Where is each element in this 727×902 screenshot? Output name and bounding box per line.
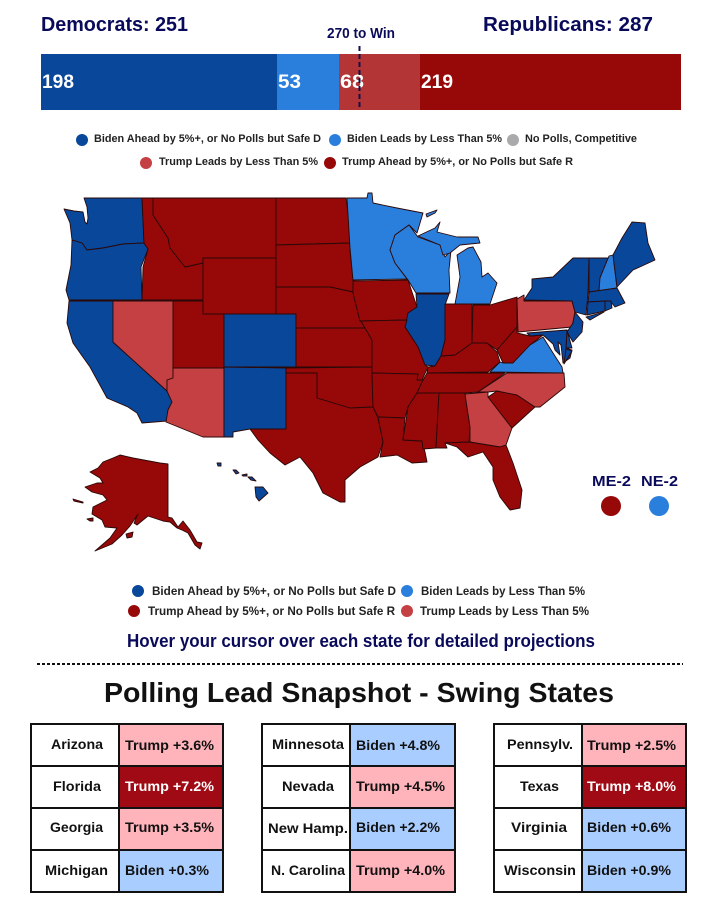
electoral vote bar: [41, 46, 681, 110]
table 2: Trump +4.0%: [356, 863, 445, 878]
legend: bottom: [128, 584, 589, 618]
label: NE-2: NE-2: [641, 473, 678, 490]
table 2: Nevada: [282, 779, 335, 794]
legend: top: No Polls, Competitive: [525, 133, 637, 145]
electoral vote bar: 219: [421, 72, 453, 93]
table 1: Georgia: [50, 820, 104, 835]
table 2: Biden +4.8%: [356, 738, 440, 753]
heading: Democrats total: Democrats: 251: [41, 14, 188, 36]
table 2: Minnesota: [272, 737, 345, 752]
electoral vote bar: 68: [340, 72, 364, 93]
table 1: Trump +7.2%: [125, 779, 214, 794]
table 3: Wisconsin: [504, 863, 576, 878]
table 3: Biden +0.9%: [587, 863, 671, 878]
table 3: Virginia: [511, 820, 568, 835]
legend: top: [76, 133, 637, 169]
table 1: Biden +0.3%: [125, 863, 209, 878]
table 2: [262, 724, 455, 892]
heading: Republicans total: Republicans: 287: [483, 14, 653, 36]
table 3: Pennsylv.: [507, 737, 573, 752]
marker: ME-2: [601, 496, 621, 516]
table 3: Biden +0.6%: [587, 820, 671, 835]
marker: NE-2: [649, 496, 669, 516]
legend: top: Biden Ahead by 5%+, or No Polls but Safe D: [94, 133, 321, 145]
label: ME-2: ME-2: [592, 473, 631, 490]
legend: bottom: Trump Leads by Less Than 5%: [420, 604, 589, 618]
table 3: [494, 724, 686, 892]
US electoral map: [64, 193, 655, 551]
table 1: Trump +3.5%: [125, 820, 214, 835]
table 3: Trump +8.0%: [587, 779, 676, 794]
legend: top: Trump Ahead by 5%+, or No Polls but Safe R: [342, 156, 573, 168]
table 2: Trump +4.5%: [356, 779, 445, 794]
legend: bottom: Trump Ahead by 5%+, or No Polls but Safe R: [148, 604, 395, 618]
table 1: Arizona: [51, 737, 104, 752]
table 2: Biden +2.2%: [356, 820, 440, 835]
table 1: Florida: [53, 779, 102, 794]
table 2: New Hamp.: [268, 821, 348, 836]
table 2: N. Carolina: [271, 863, 346, 878]
table 1: Michigan: [45, 863, 108, 878]
electoral vote bar: 53: [278, 72, 301, 93]
electoral vote bar: 198: [42, 72, 74, 93]
table 3: Trump +2.5%: [587, 738, 676, 753]
legend: bottom: Biden Leads by Less Than 5%: [421, 584, 585, 598]
label: 270 to win: 270 to Win: [327, 25, 395, 42]
legend: top: Biden Leads by Less Than 5%: [347, 133, 502, 145]
title: swing states: Polling Lead Snapshot - Swing States: [104, 677, 614, 708]
instruction text: Hover your cursor over each state for detailed projections: [127, 631, 595, 651]
table 1: [31, 724, 223, 892]
table 1: Trump +3.6%: [125, 738, 214, 753]
table 3: Texas: [520, 779, 559, 794]
legend: bottom: Biden Ahead by 5%+, or No Polls but Safe D: [152, 584, 396, 598]
legend: top: Trump Leads by Less Than 5%: [159, 156, 318, 168]
